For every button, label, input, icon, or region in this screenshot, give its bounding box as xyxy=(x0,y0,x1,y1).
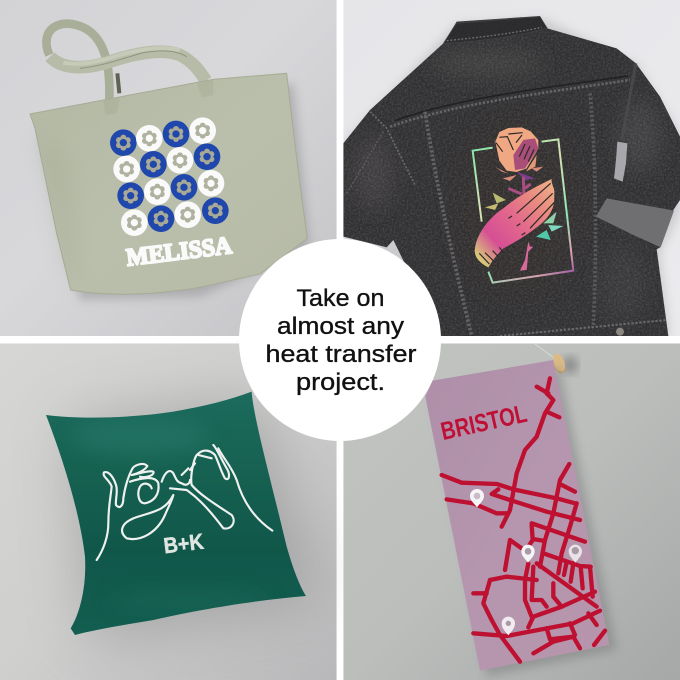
jacket denim grain xyxy=(340,0,680,337)
jacket mottling xyxy=(340,0,680,337)
banner map roads xyxy=(442,378,605,662)
pillow print: pinky promise hands xyxy=(97,445,272,560)
panel: Bristol map banner photo xyxy=(343,343,680,680)
tote handle tabs xyxy=(198,80,213,97)
pillow print: initials B+K: B+K xyxy=(162,529,205,558)
pillow velvet sheen xyxy=(87,426,251,611)
panel: denim jacket photo xyxy=(340,0,680,337)
tote handles xyxy=(46,24,206,102)
print: iridescent rose and hand xyxy=(473,127,573,283)
badge headline: heat transfer xyxy=(266,341,416,368)
print leaves xyxy=(485,193,563,271)
banner title: BRISTOL xyxy=(438,400,530,446)
badge headline: Take on xyxy=(296,285,384,312)
badge headline: project. xyxy=(296,369,385,396)
banner shadow xyxy=(483,364,618,678)
badge headline xyxy=(266,285,416,396)
pillow xyxy=(46,392,306,635)
print frame xyxy=(473,139,573,283)
print: flower dots xyxy=(110,117,229,236)
jacket sleeve cuff xyxy=(596,198,674,247)
jacket distressed patch xyxy=(614,142,627,182)
pillow shadow xyxy=(70,398,318,640)
badge headline: almost any xyxy=(277,313,404,340)
map pin: top left xyxy=(470,489,484,507)
print rose xyxy=(495,127,543,194)
map pin: center xyxy=(521,545,535,563)
tote shadow xyxy=(40,83,310,300)
jacket shadow xyxy=(343,18,680,336)
print: name MELISSA: MELISSA xyxy=(125,232,234,272)
print hand xyxy=(475,179,554,267)
banner hanging string xyxy=(535,344,553,357)
center circle badge xyxy=(239,239,441,441)
map pin: bottom xyxy=(502,617,515,635)
tote shading xyxy=(38,152,64,268)
jacket body xyxy=(343,16,680,336)
banner cloth xyxy=(425,360,609,671)
jacket pocket button xyxy=(616,328,624,336)
panel: green pillow photo xyxy=(0,343,337,680)
tote body xyxy=(30,73,307,294)
panel: tote bag photo xyxy=(0,0,337,336)
wooden peg xyxy=(553,354,566,374)
jacket collar and seams xyxy=(347,17,667,336)
map pin: right xyxy=(569,545,582,563)
banner peg shadow xyxy=(563,356,577,374)
